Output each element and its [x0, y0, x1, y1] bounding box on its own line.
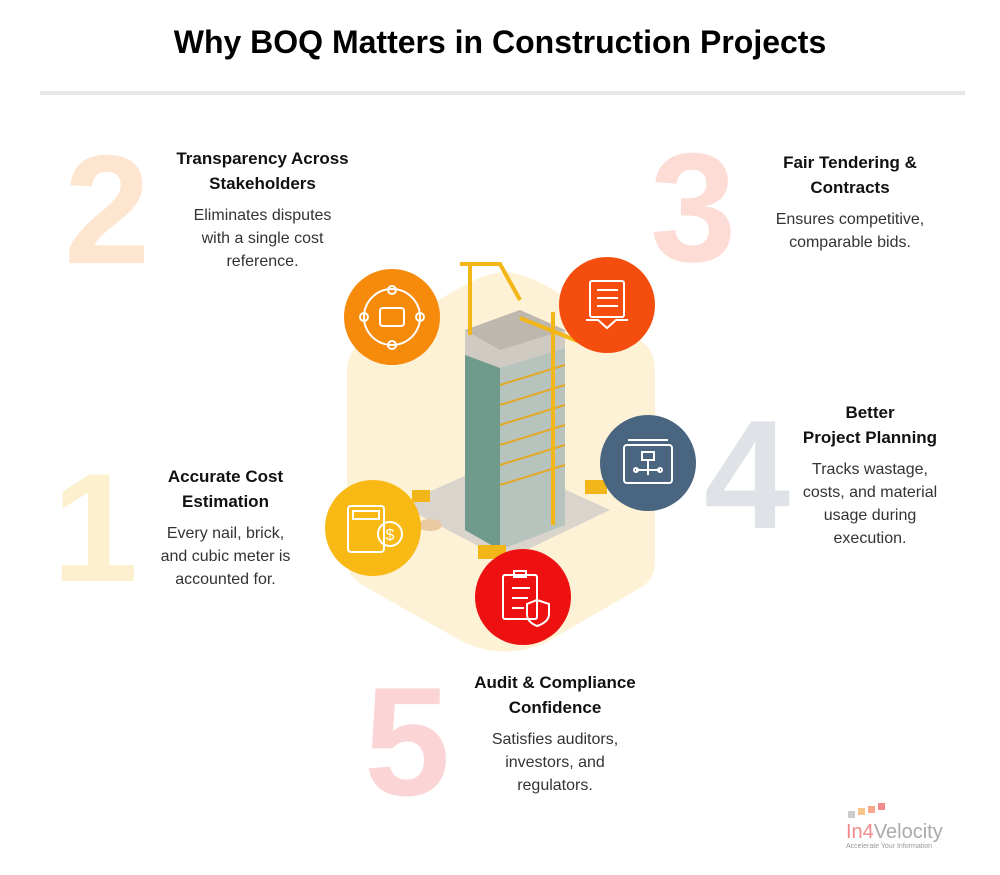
- icon: calculator: [325, 480, 421, 576]
- logo: Accelerate Your Information: [846, 843, 932, 850]
- text block: cost estimation: [161, 467, 290, 588]
- hexagon background: [347, 272, 655, 652]
- text block: planning: Better: [845, 403, 895, 422]
- text block: fair tendering: Ensures competitive,: [776, 211, 924, 228]
- number 5: 5: [364, 655, 450, 828]
- text block: audit: Confidence: [509, 698, 601, 717]
- title: Why BOQ Matters in Construction Projects: [174, 24, 826, 60]
- text block: cost estimation: Every nail, brick,: [167, 525, 284, 542]
- icon: blueprint: [600, 415, 696, 511]
- building: [400, 262, 630, 560]
- text block: planning: [803, 403, 937, 547]
- icon: calculator: $: [386, 527, 395, 544]
- text block: transparency: Stakeholders: [209, 174, 316, 193]
- text block: transparency: with a single cost: [202, 230, 323, 247]
- icon: compliance clipboard: [475, 549, 571, 645]
- text block: transparency: [176, 149, 349, 270]
- text block: audit: Satisfies auditors,: [492, 731, 618, 748]
- text block: cost estimation: Estimation: [182, 492, 269, 511]
- text block: planning: usage during: [824, 507, 916, 524]
- logo: In4Velocity: [846, 821, 943, 843]
- text block: cost estimation: Accurate Cost: [168, 467, 283, 486]
- number 3: 3: [650, 121, 736, 294]
- icon: stakeholders (orange): [344, 269, 440, 365]
- text block: transparency: reference.: [226, 253, 299, 270]
- text block: transparency: Transparency Across: [176, 149, 349, 168]
- number 2: 2: [64, 123, 150, 296]
- text block: fair tendering: Contracts: [810, 178, 890, 197]
- text block: fair tendering: comparable bids.: [789, 234, 911, 251]
- text block: planning: costs, and material: [803, 484, 937, 501]
- icon: contract handshake: [559, 257, 655, 353]
- text block: planning: Tracks wastage,: [812, 461, 928, 478]
- text block: audit: [474, 673, 636, 794]
- text block: planning: Project Planning: [803, 428, 937, 447]
- number 4: 4: [704, 388, 790, 561]
- text block: audit: Audit & Compliance: [474, 673, 636, 692]
- text block: audit: regulators.: [517, 777, 593, 794]
- text block: cost estimation: accounted for.: [175, 571, 276, 588]
- number 1: 1: [52, 441, 138, 614]
- text block: audit: investors, and: [505, 754, 605, 771]
- text block: fair tendering: Fair Tendering &: [783, 153, 917, 172]
- text block: fair tendering: [776, 153, 924, 251]
- text block: cost estimation: and cubic meter is: [161, 548, 290, 565]
- logo: [846, 803, 943, 850]
- text block: transparency: Eliminates disputes: [194, 207, 331, 224]
- text block: planning: execution.: [834, 530, 906, 547]
